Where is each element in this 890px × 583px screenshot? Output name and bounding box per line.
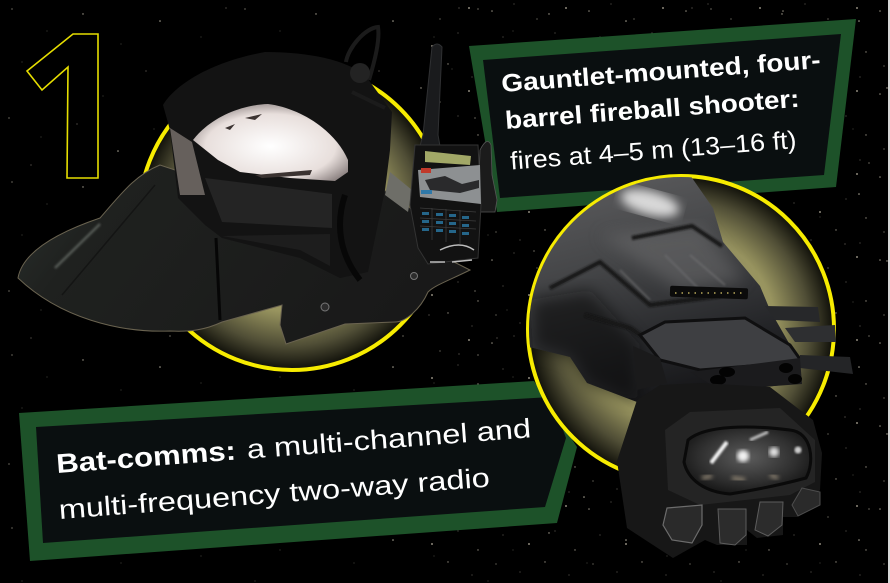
callout text: multi-frequency two-way radio: [58, 463, 491, 525]
number 1 outline: [27, 34, 98, 178]
panel frame: [19, 381, 577, 561]
knuckle highlights: [711, 442, 727, 463]
gauntlet arm: [529, 177, 788, 408]
cape seam: [216, 238, 220, 320]
fireball nozzles: [690, 358, 802, 390]
cape highlight: [55, 224, 100, 268]
finger guards: [663, 505, 702, 543]
callout text: Gauntlet-mounted, four-: [500, 46, 822, 98]
red button: [421, 168, 431, 173]
cowl cape: [18, 165, 470, 344]
callout text: [54, 413, 536, 525]
panel inner: [36, 397, 566, 543]
keypad grid: [420, 208, 476, 244]
collar strap: [205, 178, 332, 228]
yellow circle behind cowl: [139, 64, 445, 370]
panel: bat-comms callout: [19, 381, 577, 561]
callout text: a multi-channel and: [246, 413, 532, 465]
barrel plate: [640, 318, 802, 370]
radio screen: [425, 151, 471, 165]
gusset panel: [385, 172, 412, 212]
snap buttons: [321, 303, 329, 311]
straps: [765, 306, 820, 322]
finger glints: [724, 516, 740, 520]
silver panel: [418, 165, 481, 204]
blue button: [421, 190, 432, 194]
inner white lining: [193, 104, 348, 181]
cape fold: [62, 185, 155, 295]
arm soft plate light: [614, 230, 741, 288]
hood and collar base: [163, 52, 392, 278]
earpiece foam: [350, 63, 370, 83]
side clip: [478, 141, 497, 212]
earpiece: [346, 27, 385, 108]
glove body: [617, 383, 822, 558]
panel frame: [469, 19, 856, 212]
knuckle guard: [684, 427, 811, 494]
callout text: fires at 4–5 m (13–16 ft): [509, 126, 797, 176]
icon: armoured glove: [617, 383, 822, 558]
collar strap lower: [222, 234, 330, 266]
panel inner: [483, 34, 841, 198]
callout text: Bat-comms:: [55, 436, 237, 479]
radio bottom detail: [430, 245, 474, 262]
arm dark lower shading: [530, 290, 640, 402]
arm ridges: [550, 226, 722, 345]
antenna: [420, 44, 442, 146]
yellow circle with gauntlet: [526, 174, 853, 471]
icon: two-way radio: [410, 44, 497, 264]
dotted rail: [670, 286, 748, 299]
arm highlight: [618, 184, 682, 222]
keypad: [422, 212, 469, 235]
lower knuckle glints: [702, 475, 778, 480]
panel: gauntlet callout: [469, 19, 856, 212]
lining shadow: [225, 114, 312, 178]
spring: [633, 346, 667, 390]
cowl illustration: [18, 27, 470, 344]
radio body: [410, 145, 481, 264]
rail dots: [675, 292, 744, 294]
collar outer left: [170, 128, 205, 195]
glove shell around guard: [665, 408, 815, 505]
callout text: barrel fireball shooter:: [504, 85, 800, 135]
zipper: [340, 195, 360, 280]
disc: [528, 176, 834, 482]
callout text: [500, 46, 827, 176]
